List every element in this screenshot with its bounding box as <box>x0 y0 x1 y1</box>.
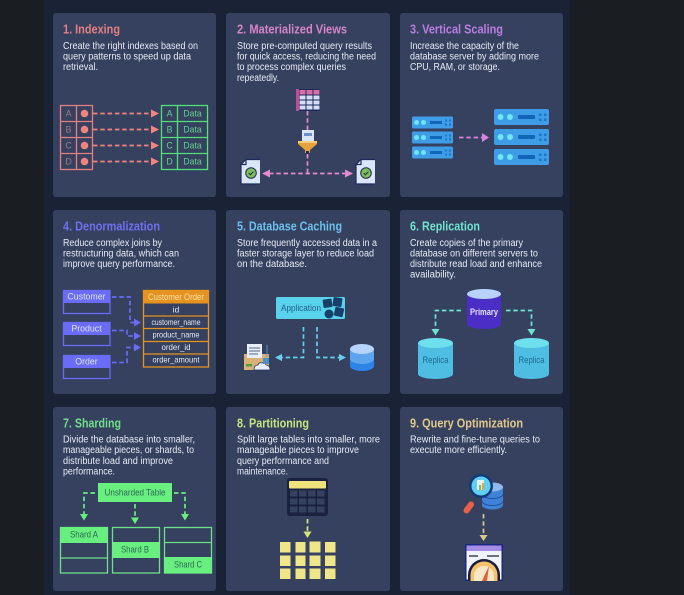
icon: replica database left: Replica <box>422 355 449 365</box>
diagram: index table to data table <box>60 106 208 170</box>
text: sharding description <box>63 435 195 477</box>
icon: table <box>296 89 320 111</box>
text: vertical scaling description <box>410 41 539 73</box>
text: materialized views description: Store pre-computed query results <box>237 41 372 52</box>
heading: database caching: 5. Database Caching <box>237 218 342 234</box>
table: shard B <box>112 528 160 573</box>
diagram: index table to data table: D <box>65 156 72 166</box>
table: customer order: order_amount <box>152 354 200 364</box>
arrow: partition split <box>304 519 312 538</box>
table: shard C <box>164 528 212 574</box>
diagram: index table to data table: A <box>66 108 72 118</box>
icon: replica database right <box>514 338 549 379</box>
heading: denormalization: 4. Denormalization <box>63 218 160 234</box>
text: replication description: Create copies of the primary <box>410 238 523 249</box>
table: shard C: Shard C <box>174 560 203 570</box>
text: sharding description: distribute load and improve <box>63 456 173 467</box>
icon: replica database left <box>418 338 453 379</box>
table: shard A: Shard A <box>70 530 98 540</box>
box: unsharded table: Unsharded Table <box>104 488 166 498</box>
icon: partitioned cells <box>280 542 336 579</box>
text: denormalization description <box>63 238 179 270</box>
table: source tables: Order <box>75 356 98 366</box>
diagram: index table to data table: Data <box>183 108 202 118</box>
table: customer order: customer_name <box>152 317 201 327</box>
table: customer order: id <box>173 304 180 314</box>
panel: materialized views <box>226 13 390 197</box>
heading: replication: 6. Replication <box>410 218 480 234</box>
diagram: index table to data table: D <box>166 156 173 166</box>
heading: materialized views: 2. Materialized Views <box>237 22 347 36</box>
diagram: index table to data table: C <box>166 140 173 150</box>
table: customer order: product_name <box>152 330 200 340</box>
text: materialized views description <box>237 41 376 84</box>
text: sharding description: performance. <box>63 466 115 477</box>
diagram: index table to data table: C <box>65 140 72 150</box>
text: replication description: distribute read load and enhance <box>410 259 542 270</box>
table: source tables: Customer <box>67 292 106 302</box>
heading: indexing: 1. Indexing <box>63 22 120 36</box>
text: sharding description: manageable pieces, or shards, to <box>63 445 194 456</box>
icon: browser performance gauge <box>465 544 503 581</box>
text: partitioning description <box>237 435 380 477</box>
text: indexing description: query patterns to speed up data <box>63 52 191 63</box>
icon: large table <box>287 478 328 516</box>
text: indexing description: retrieval. <box>63 62 98 73</box>
text: replication description <box>410 238 542 281</box>
table: customer order: Customer Order <box>148 292 204 302</box>
panel: indexing <box>53 13 216 197</box>
arrows: replication <box>432 310 536 336</box>
diagram: index table to data table: Data <box>183 124 202 134</box>
heading: query optimization: 9. Query Optimization <box>410 416 523 430</box>
text: query optimization description: execute more efficiently. <box>410 445 507 456</box>
text: partitioning description: maintenance. <box>237 466 288 477</box>
diagram: index table to data table: Data <box>183 156 202 166</box>
text: partitioning description: query performance and <box>237 456 329 467</box>
text: materialized views description: to process complex queries <box>237 62 346 73</box>
text: database caching description: faster storage layer to reduce load <box>237 248 374 259</box>
diagram: index table to data table: B <box>167 124 173 134</box>
text: denormalization description: restructuring data, which can <box>63 248 179 259</box>
arrows: denormalize joins <box>112 297 141 362</box>
arrows: cache and database paths <box>275 327 346 361</box>
box: application: Application <box>281 303 321 313</box>
box: application <box>276 297 345 319</box>
table: source tables <box>63 290 110 378</box>
arrows: filter outputs <box>262 111 353 178</box>
panel: database caching <box>226 210 390 394</box>
panel: sharding <box>53 407 216 591</box>
text: partitioning description: Split large tables into smaller, more <box>237 435 380 446</box>
diagram: index table to data table: Data <box>183 140 202 150</box>
heading: vertical scaling: 3. Vertical Scaling <box>410 22 503 36</box>
text: partitioning description: manageable pieces to improve <box>237 445 359 456</box>
icon: cache folder <box>244 344 270 370</box>
text: database caching description <box>237 238 377 270</box>
diagram: index table to data table: A <box>167 108 173 118</box>
heading: sharding: 7. Sharding <box>63 416 121 430</box>
heading: partitioning: 8. Partitioning <box>237 416 309 430</box>
panel: vertical scaling <box>400 13 563 197</box>
panel: query optimization <box>400 407 563 591</box>
text: query optimization description: Rewrite and fine-tune queries to <box>410 435 540 446</box>
text: vertical scaling description: CPU, RAM, or storage. <box>410 62 500 73</box>
icon: primary database <box>467 289 501 329</box>
text: database caching description: Store frequently accessed data in a <box>237 238 377 249</box>
icon: query filter funnel <box>298 130 317 154</box>
table: customer order <box>143 290 209 367</box>
arrow: scale up <box>459 133 489 142</box>
panel: denormalization <box>53 210 216 394</box>
text: sharding description: Divide the database into smaller, <box>63 435 195 446</box>
text: materialized views description: repeatedly. <box>237 73 279 84</box>
icon: magnifier and database <box>466 474 503 510</box>
icon: small servers <box>412 116 453 158</box>
icon: document left <box>241 160 260 184</box>
text: denormalization description: improve query performance. <box>63 259 175 270</box>
text: vertical scaling description: Increase the capacity of the <box>410 41 519 52</box>
panel: replication <box>400 210 563 394</box>
icon: primary database: Primary <box>470 306 499 317</box>
icon: document right <box>356 160 375 184</box>
diagram: index table to data table: B <box>66 124 72 134</box>
icon: large servers <box>494 109 549 165</box>
text: materialized views description: for quick access, reducing the need <box>237 52 376 63</box>
text: vertical scaling description: database server by adding more <box>410 52 539 63</box>
text: indexing description <box>63 41 198 73</box>
icon: replica database right: Replica <box>518 355 545 365</box>
text: denormalization description: Reduce complex joins by <box>63 238 162 249</box>
table: customer order: order_id <box>162 342 191 352</box>
table: shard A <box>60 527 108 573</box>
text: indexing description: Create the right indexes based on <box>63 41 198 52</box>
box: unsharded table <box>98 483 172 502</box>
text: database caching description: on the database. <box>237 259 307 270</box>
table: shard B: Shard B <box>121 544 149 554</box>
arrow: optimization flow <box>480 514 488 541</box>
text: query optimization description <box>410 435 540 456</box>
text: replication description: database on different servers to <box>410 248 538 259</box>
icon: database cylinder <box>350 344 374 371</box>
table: source tables: Product <box>71 324 102 334</box>
panel: partitioning <box>226 407 390 591</box>
arrows: shard distribution <box>80 493 189 524</box>
text: replication description: availability. <box>410 270 456 281</box>
